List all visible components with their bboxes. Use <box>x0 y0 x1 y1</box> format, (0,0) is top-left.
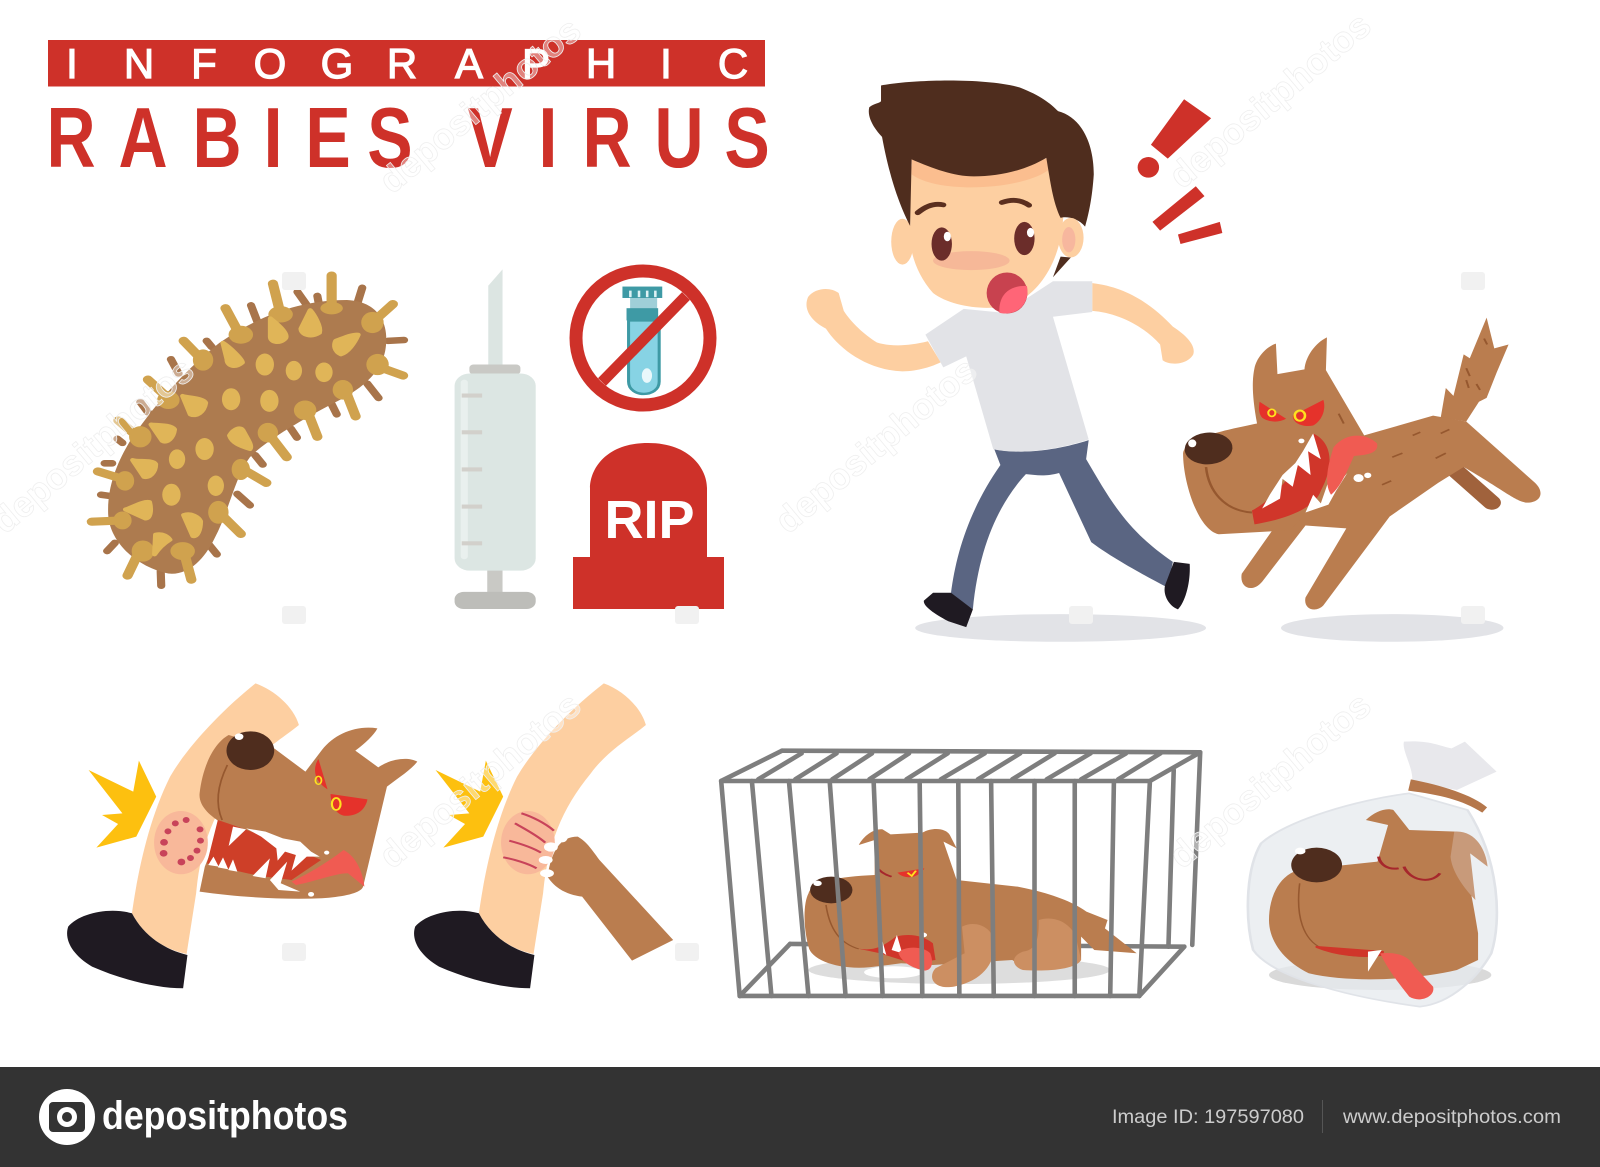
running scared man <box>806 81 1194 627</box>
depositphotos watermarks: depositphotos <box>371 9 589 201</box>
icon: syringe <box>455 269 536 609</box>
open mouth <box>987 272 1027 314</box>
neck shadow <box>1053 257 1071 277</box>
leg with dog bite <box>67 683 417 988</box>
mouth, tongue and foam <box>856 933 936 978</box>
shoe <box>414 911 534 988</box>
nose <box>226 731 274 770</box>
icon: rabies virus particle <box>92 276 404 586</box>
angry eyes <box>1259 400 1324 426</box>
dog head biting <box>200 728 417 899</box>
title: RABIES VIRUS: RABIES VIRUS <box>46 91 770 186</box>
drowsy eyes <box>876 867 924 877</box>
scratch wound <box>501 811 555 874</box>
leg <box>132 683 299 954</box>
hair shade and blush <box>912 157 1048 270</box>
ear <box>1451 832 1488 900</box>
plastic bag back <box>1248 793 1497 1007</box>
tongue <box>292 850 364 887</box>
footer logo: depositphotos <box>102 1094 348 1138</box>
arms <box>806 283 1194 371</box>
angry eyes <box>315 759 367 816</box>
footer bar <box>0 1067 1600 1167</box>
hair <box>869 81 1094 227</box>
pain star <box>89 761 156 848</box>
muzzle line <box>218 765 227 820</box>
t-shirt <box>925 281 1092 452</box>
icon: no test tube prohibition sign <box>576 271 710 405</box>
nose <box>1181 430 1236 467</box>
leg with dog scratch <box>414 683 673 988</box>
ground shadows under man and dog <box>915 614 1503 642</box>
dead dog in plastic bag <box>1248 741 1497 1007</box>
bag knot tuft <box>1404 741 1497 790</box>
footer website: www.depositphotos.com <box>1342 1107 1561 1128</box>
mouth line and tongue <box>1299 883 1433 999</box>
tail <box>1441 318 1509 422</box>
dog body <box>805 829 1137 969</box>
dog paw and claws <box>539 831 673 961</box>
eyes and brows <box>918 200 1035 261</box>
trousers <box>951 440 1173 609</box>
nose <box>1291 848 1342 882</box>
alarm exclamation marks <box>1138 99 1222 244</box>
bite wound <box>154 811 208 874</box>
rabid dog chasing <box>1181 318 1541 610</box>
muzzle line <box>826 905 859 949</box>
jaws and teeth <box>207 820 329 897</box>
depositphotos watermarks: depositphotos <box>767 349 985 541</box>
icon: RIP tombstone: RIP <box>604 490 695 550</box>
title banner: INFOGRAPHIC: INFOGRAPHIC <box>66 40 748 87</box>
shoes <box>924 562 1190 627</box>
shoe <box>67 911 187 988</box>
muzzle line <box>1206 467 1252 513</box>
bag shadow <box>1269 960 1491 990</box>
cage back and top <box>721 751 1200 996</box>
closed eyes <box>1379 857 1440 880</box>
face <box>910 159 1063 308</box>
watermark camera icons <box>282 272 1485 961</box>
head <box>1183 337 1364 534</box>
leg <box>479 683 646 954</box>
fur marks <box>1339 339 1487 485</box>
footer image id: Image ID: 197597080 <box>1112 1107 1304 1128</box>
dog head <box>1269 809 1478 979</box>
cage front bars <box>721 781 1150 996</box>
bag tie <box>1408 779 1487 813</box>
footer logo <box>39 1089 348 1145</box>
depositphotos watermarks <box>0 4 1379 876</box>
pain star <box>436 761 503 848</box>
right ear <box>1058 218 1084 257</box>
caged rabid dog <box>721 751 1200 996</box>
back leg <box>1456 471 1492 503</box>
body and legs <box>1241 416 1541 610</box>
footer divider <box>1322 1100 1323 1133</box>
dog legs <box>932 919 1081 987</box>
floor shadow <box>809 956 1110 984</box>
left ear <box>891 219 914 265</box>
depositphotos watermarks: depositphotos <box>371 684 589 876</box>
depositphotos watermarks: depositphotos <box>1161 684 1379 876</box>
mouth, teeth and foam <box>1252 433 1377 524</box>
depositphotos watermarks: depositphotos <box>1161 4 1379 196</box>
nose <box>810 877 852 903</box>
icon: RIP tombstone <box>573 443 724 609</box>
